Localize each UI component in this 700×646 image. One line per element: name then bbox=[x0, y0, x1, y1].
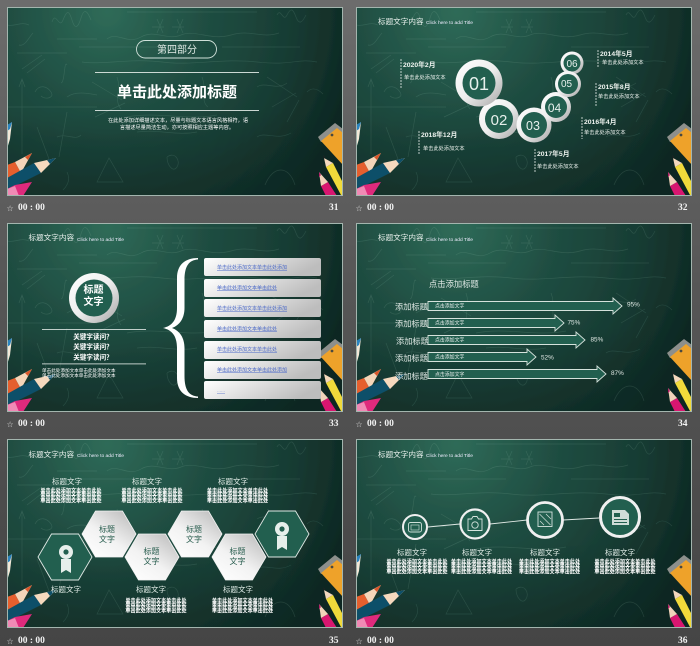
step 3 text: 单击此处添加文本单击此处 bbox=[519, 562, 580, 568]
keyword list bbox=[42, 329, 146, 364]
upper text block 1: 标题文字 bbox=[52, 476, 82, 486]
section description bbox=[108, 116, 248, 131]
keyword note: 单击此处添加文本单击此处添加文本 bbox=[42, 367, 116, 374]
grey hexagon 1: 文字 bbox=[99, 534, 115, 544]
list box 3 bbox=[204, 299, 321, 317]
keyword list: 关键字读问？ bbox=[73, 342, 113, 351]
arrow bar 87%: 点击添加文字 bbox=[435, 371, 464, 378]
slide 33 header bbox=[28, 232, 124, 243]
arrow bar 87%: 87% bbox=[611, 370, 624, 377]
list box 5: 单击此处添加文本单击此处 bbox=[217, 346, 277, 353]
lower text block 3: 单击此处添加文本单击此处 bbox=[212, 608, 273, 614]
lower text block 3: 单击此处添加文本单击此处 bbox=[212, 597, 273, 604]
slide 33 chalkboard background bbox=[7, 223, 343, 412]
timeline label 2018: 2018年12月 bbox=[421, 130, 457, 139]
grey hexagon 2 bbox=[125, 534, 179, 580]
chart title: 点击添加标题 bbox=[429, 279, 479, 289]
slide 35 header: 标题文字内容 bbox=[28, 449, 74, 459]
arrow bar 85% bbox=[396, 332, 604, 348]
arrow bar 52%: 52% bbox=[541, 354, 554, 362]
slide 31 chalkboard background bbox=[7, 7, 343, 196]
slide 32 header: 标题文字内容 bbox=[378, 16, 424, 26]
upper text block 1: 单击此处添加文本单击此处 bbox=[40, 498, 102, 504]
slide 36 chalkboard background bbox=[356, 439, 692, 628]
step 1 text: 单击此处添加文本单击此处 bbox=[386, 568, 448, 576]
upper text block 2: 单击此处添加文本单击此处 bbox=[121, 487, 183, 494]
circle 06: 06 bbox=[566, 59, 578, 70]
step 1 text: 单击此处添加文本单击此处 bbox=[386, 562, 448, 568]
timeline label 2018: 单击此处添加文本 bbox=[423, 144, 465, 152]
footer: slide 32: 32 bbox=[678, 203, 688, 213]
step 4 text bbox=[594, 547, 656, 576]
timeline label 2020 bbox=[401, 59, 446, 88]
grey hexagon 3 bbox=[168, 511, 222, 557]
timeline label 2014 bbox=[598, 49, 644, 68]
circle 01: 01 bbox=[469, 74, 489, 94]
circle 01 bbox=[456, 60, 502, 106]
timeline label 2020: 2020年2月 bbox=[403, 60, 436, 69]
arrow bar 75%: 点击添加文字 bbox=[435, 320, 464, 326]
step 1 text bbox=[386, 547, 448, 576]
grey hexagon 3: 标题 bbox=[186, 524, 202, 534]
footer: slide 36 bbox=[356, 636, 688, 646]
timeline label 2014: 单击此处添加文本 bbox=[602, 58, 644, 66]
lower text block 2: 标题文字 bbox=[136, 584, 166, 594]
grey hexagon 4: 标题 bbox=[230, 546, 246, 556]
slide 34 header: 标题文字内容 bbox=[378, 232, 424, 242]
title ring: 文字 bbox=[84, 295, 104, 308]
keyword list: 关键字读问？ bbox=[73, 332, 113, 341]
grey hexagon 1 bbox=[82, 511, 136, 557]
timeline label 2020: 单击此处添加文本 bbox=[404, 73, 446, 81]
timeline label 2015 bbox=[596, 82, 640, 107]
upper text block 2: 标题文字 bbox=[132, 476, 162, 486]
footer: slide 34: ☆ bbox=[356, 420, 363, 429]
step 4 text: 单击此处添加文本单击此处 bbox=[594, 565, 656, 572]
section description: 在此处添加详细描述文本，尽量与标题文本语言风格相符，语 bbox=[108, 116, 248, 124]
circle 05 bbox=[555, 71, 581, 97]
grey hexagon 2: 文字 bbox=[144, 556, 160, 566]
timeline label 2015: 单击此处添加文本 bbox=[598, 92, 640, 100]
section description: 言描述尽量简洁生动，亦可按照相应主题等内容。 bbox=[120, 123, 234, 131]
slide 36 header: 标题文字内容 bbox=[378, 449, 424, 459]
grey hexagon 4: 文字 bbox=[230, 556, 246, 566]
slide 34 chalkboard background bbox=[356, 223, 692, 412]
upper text block 2 bbox=[121, 476, 183, 504]
footer: slide 35: 35 bbox=[329, 636, 339, 646]
list box 3: 单击此处添加文本单击此处添加 bbox=[217, 305, 287, 312]
section heading: 单击此处添加标题 bbox=[117, 83, 237, 101]
grey hexagon 1: 标题 bbox=[99, 524, 115, 534]
footer: slide 35 bbox=[6, 636, 339, 646]
keyword note: 单击此处添加文本单击此处添加文本 bbox=[42, 372, 116, 379]
circle 05: 05 bbox=[561, 79, 572, 90]
grey hexagon 4 bbox=[212, 534, 266, 580]
list box 6: 单击此处添加文本单击此处添加 bbox=[217, 366, 287, 374]
list box 5 bbox=[204, 341, 321, 359]
list box 6 bbox=[204, 361, 321, 379]
curly brace bbox=[163, 258, 198, 398]
timeline label 2016: 单击此处添加文本 bbox=[584, 128, 626, 136]
slide 32 chalkboard background bbox=[356, 7, 692, 196]
timeline label 2016: 2016年4月 bbox=[584, 117, 616, 126]
slide 33 header: Click here to add Title bbox=[77, 237, 124, 243]
keyword note bbox=[42, 367, 116, 379]
upper text block 1: 单击此处添加文本单击此处 bbox=[40, 494, 102, 501]
timeline label 2016 bbox=[582, 117, 626, 139]
circle 04: 04 bbox=[548, 101, 561, 115]
list box 4 bbox=[204, 320, 321, 338]
step 2 text: 单击此处添加文本单击此处 bbox=[451, 558, 512, 565]
footer: slide 33: 00 : 00 bbox=[18, 419, 45, 429]
grey hexagon 3: 文字 bbox=[186, 534, 202, 544]
step 1 text: 标题文字 bbox=[397, 547, 427, 557]
list box 7: …… bbox=[217, 388, 225, 393]
keyword list: 关键字读问？ bbox=[73, 352, 113, 362]
slide 34 header: Click here to add Title bbox=[426, 237, 473, 243]
arrow bar 85%: 添加标题 bbox=[396, 336, 429, 346]
upper text block 2: 单击此处添加文本单击此处 bbox=[121, 494, 183, 501]
arrow bar 85%: 点击添加文字 bbox=[435, 336, 464, 344]
timeline label 2017: 2017年5月 bbox=[537, 149, 570, 158]
timeline label 2015: 2015年8月 bbox=[598, 82, 630, 91]
arrow bar 95%: 95% bbox=[627, 302, 640, 308]
footer: slide 36: ☆ bbox=[356, 637, 363, 646]
footer: slide 32 bbox=[356, 203, 688, 213]
section pill label: 第四部分 bbox=[157, 43, 197, 56]
slide 35 header bbox=[28, 449, 124, 459]
arrow bar 52% bbox=[395, 349, 554, 365]
footer: slide 31 bbox=[6, 203, 339, 213]
footer: slide 33: ☆ bbox=[6, 420, 14, 429]
panel: slide 33 brace list bbox=[7, 223, 343, 412]
step 3 text: 标题文字 bbox=[530, 547, 560, 557]
lower text block 3 bbox=[212, 584, 273, 614]
footer: slide 31: 00 : 00 bbox=[18, 203, 45, 213]
footer: slide 32: ☆ bbox=[356, 204, 363, 213]
step 4 text: 单击此处添加文本单击此处 bbox=[594, 562, 656, 568]
lower text block 2 bbox=[125, 584, 187, 614]
footer: slide 35: ☆ bbox=[6, 637, 14, 646]
arrow bar 75%: 75% bbox=[568, 320, 581, 326]
upper text block 1 bbox=[40, 476, 102, 504]
connector line bbox=[428, 518, 599, 527]
circle 04 bbox=[541, 92, 571, 122]
green hexagon left with rosette icon bbox=[38, 534, 92, 580]
step 4 text: 单击此处添加文本单击此处 bbox=[594, 568, 656, 576]
arrow bar 75%: 添加标题 bbox=[395, 318, 428, 328]
slide 35 chalkboard background bbox=[7, 439, 343, 628]
timeline label 2017 bbox=[535, 149, 579, 173]
arrow bar 85%: 85% bbox=[590, 336, 604, 344]
lower text block 3: 单击此处添加文本单击此处 bbox=[212, 600, 273, 608]
upper text block 1: 单击此处添加文本单击此处 bbox=[40, 490, 102, 498]
upper text block 3: 单击此处添加文本单击此处 bbox=[207, 487, 268, 494]
title ring: 标题 bbox=[84, 283, 104, 296]
step 3 text: 单击此处添加文本单击此处 bbox=[519, 568, 580, 576]
step 3 text bbox=[519, 547, 580, 576]
upper text block 3: 标题文字 bbox=[218, 476, 248, 486]
section pill label bbox=[136, 40, 216, 58]
list box 7 bbox=[204, 381, 321, 399]
circle 02: 02 bbox=[491, 112, 507, 129]
upper text block 1: 单击此处添加文本单击此处 bbox=[40, 487, 102, 494]
panel: slide 36 icon steps bbox=[356, 439, 692, 628]
footer: slide 32: 00 : 00 bbox=[367, 203, 394, 213]
step 3 icon circle bbox=[528, 502, 562, 538]
arrow bar 75% bbox=[395, 315, 581, 331]
lower text block 2: 单击此处添加文本单击此处 bbox=[125, 604, 187, 611]
timeline label 2014: 2014年5月 bbox=[600, 49, 632, 58]
step 2 text: 单击此处添加文本单击此处 bbox=[451, 562, 512, 568]
footer: slide 33 bbox=[6, 419, 339, 429]
footer: slide 34 bbox=[356, 419, 688, 429]
list box 1: 单击此处添加文本单击此处添加 bbox=[217, 264, 287, 271]
footer: slide 36: 00 : 00 bbox=[367, 636, 394, 646]
upper text block 2: 单击此处添加文本单击此处 bbox=[121, 498, 183, 504]
step 4 icon circle bbox=[600, 498, 640, 536]
slide 33 header: 标题文字内容 bbox=[28, 232, 74, 242]
slide 35 header: Click here to add Title bbox=[77, 453, 124, 459]
timeline label 2017: 单击此处添加文本 bbox=[537, 162, 579, 170]
circle 03 bbox=[516, 108, 552, 142]
slide 36 header: Click here to add Title bbox=[426, 453, 473, 459]
footer: slide 34: 34 bbox=[678, 419, 688, 429]
circle 06 bbox=[560, 52, 584, 74]
arrow bar 87%: 添加标题 bbox=[395, 371, 428, 381]
step 1 text: 单击此处添加文本单击此处 bbox=[386, 565, 448, 572]
arrow bar 52%: 添加标题 bbox=[395, 353, 428, 363]
upper text block 2: 单击此处添加文本单击此处 bbox=[121, 490, 183, 498]
upper text block 3: 单击此处添加文本单击此处 bbox=[207, 494, 268, 501]
arrow bar 52%: 点击添加文字 bbox=[435, 354, 464, 360]
step 4 text: 标题文字 bbox=[605, 547, 635, 557]
step 3 text: 单击此处添加文本单击此处 bbox=[519, 565, 580, 572]
footer: slide 34: 00 : 00 bbox=[367, 419, 394, 429]
upper text block 3: 单击此处添加文本单击此处 bbox=[207, 490, 268, 498]
panel: slide 34 arrow bars bbox=[356, 223, 692, 412]
lower text block 3: 单击此处添加文本单击此处 bbox=[212, 604, 273, 611]
list box 1 bbox=[204, 258, 321, 276]
step 4 text: 单击此处添加文本单击此处 bbox=[594, 558, 656, 565]
upper text block 3: 单击此处添加文本单击此处 bbox=[207, 498, 268, 504]
arrow bar 95%: 添加标题 bbox=[395, 302, 428, 312]
step 2 text: 单击此处添加文本单击此处 bbox=[451, 565, 512, 572]
list box 2: 单击此处添加文本单击此处 bbox=[217, 284, 277, 292]
footer: slide 35: 00 : 00 bbox=[18, 636, 45, 646]
green hexagon right with rosette icon bbox=[255, 511, 309, 557]
slide 32 header bbox=[378, 16, 473, 26]
lower text block 2: 单击此处添加文本单击此处 bbox=[125, 608, 187, 614]
footer: slide 33: 33 bbox=[329, 419, 339, 429]
step 1 text: 单击此处添加文本单击此处 bbox=[386, 558, 448, 565]
lower label 1: 标题文字 bbox=[51, 584, 81, 594]
list box 4: 单击此处添加文本单击此处 bbox=[217, 326, 277, 332]
step 3 text: 单击此处添加文本单击此处 bbox=[519, 558, 580, 565]
lower text block 2: 单击此处添加文本单击此处 bbox=[125, 600, 187, 608]
lower text block 2: 单击此处添加文本单击此处 bbox=[125, 597, 187, 604]
footer: slide 36: 36 bbox=[678, 636, 688, 646]
circle 03: 03 bbox=[526, 119, 540, 133]
grey hexagon 2: 标题 bbox=[144, 546, 160, 556]
panel: slide 35 hexagon chain bbox=[7, 439, 343, 628]
step 2 text: 标题文字 bbox=[462, 547, 492, 557]
slide 36 header bbox=[378, 449, 473, 459]
footer: slide 31: 31 bbox=[329, 203, 339, 213]
timeline label 2018 bbox=[419, 130, 465, 155]
step 1 icon circle bbox=[403, 515, 427, 539]
step 2 icon circle bbox=[460, 510, 490, 538]
list box 2 bbox=[204, 279, 321, 297]
arrow bar 87% bbox=[395, 366, 624, 382]
slide 32 header: Click here to add Title bbox=[426, 20, 473, 26]
upper text block 3 bbox=[207, 476, 268, 504]
circle 02 bbox=[479, 99, 519, 139]
step 2 text bbox=[451, 547, 512, 576]
panel: slide 32 timeline bbox=[356, 7, 692, 196]
slide 34 header bbox=[378, 232, 473, 243]
lower text block 3: 标题文字 bbox=[223, 584, 253, 594]
arrow bar 95%: 点击添加文字 bbox=[435, 302, 464, 310]
title ring bbox=[69, 273, 119, 323]
arrow bar 95% bbox=[395, 298, 640, 314]
footer: slide 31: ☆ bbox=[6, 204, 14, 213]
step 2 text: 单击此处添加文本单击此处 bbox=[451, 568, 512, 576]
panel: slide 31 section title bbox=[7, 7, 343, 196]
